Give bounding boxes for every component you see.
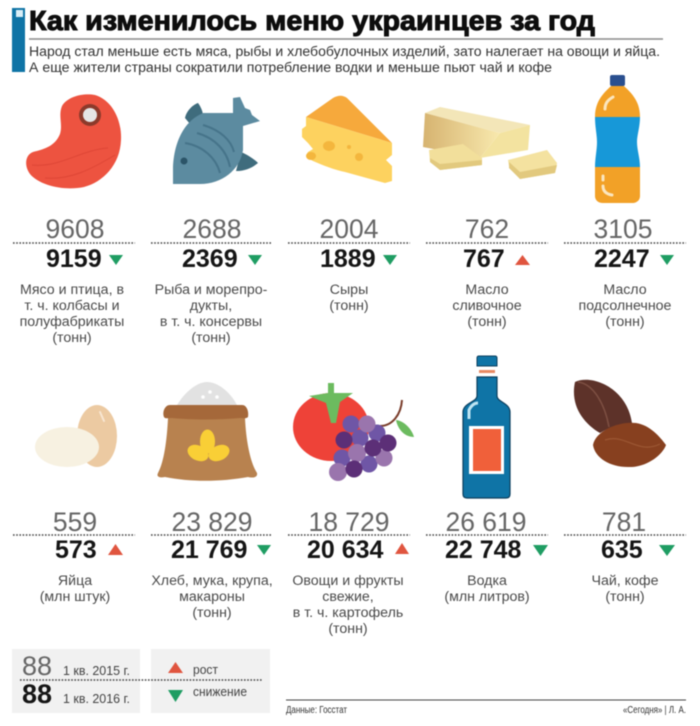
stat label: vegetables: свежие, bbox=[322, 589, 374, 605]
stat label: butter: сливочное bbox=[452, 298, 522, 314]
stat label: butter: (тонн) bbox=[467, 314, 507, 330]
icon: flour sack bbox=[157, 382, 257, 481]
stat label: cheese: Сыры bbox=[330, 282, 368, 298]
stat label: fish: дукты, bbox=[190, 298, 232, 314]
legend: рост bbox=[193, 663, 218, 677]
footer bbox=[286, 700, 686, 716]
icon: vodka bottle bbox=[463, 356, 510, 498]
legend: снижение bbox=[193, 685, 247, 699]
stat: bread: 23 829 bbox=[171, 507, 253, 537]
icon: coffee beans bbox=[574, 380, 666, 467]
stat: sunflower oil bbox=[564, 214, 686, 273]
legend: 88 bbox=[22, 651, 52, 681]
intro text: А еще жители страны сократили потребление водки и меньше пьют чай и кофе bbox=[29, 60, 552, 75]
stat label: vegetables: в т. ч. картофель bbox=[293, 605, 403, 621]
stat: butter: 762 bbox=[465, 214, 509, 244]
icon: tomato and grapes bbox=[293, 383, 414, 481]
stat: vodka: 22 748 bbox=[445, 536, 522, 564]
stat label: fish: Рыба и морепро- bbox=[155, 282, 268, 298]
icon: oil bottle bbox=[595, 75, 640, 203]
footer: «Сегодня» | Л. А. bbox=[623, 705, 686, 716]
stat label: tea and coffee: (тонн) bbox=[605, 589, 645, 605]
stat: bread: 21 769 bbox=[171, 536, 247, 564]
stat: vegetables: 18 729 bbox=[308, 507, 390, 537]
stat label: meat: т. ч. колбасы и bbox=[24, 298, 120, 314]
stat label: vegetables: (тонн) bbox=[328, 621, 368, 637]
stat: eggs: 573 bbox=[55, 536, 97, 564]
icon: meat bbox=[26, 94, 121, 188]
stat label: eggs: Яйца bbox=[58, 573, 92, 589]
stat: fish bbox=[151, 214, 272, 273]
stat label: sunflower oil: Масло bbox=[603, 282, 647, 298]
stat label: vegetables: Овощи и фрукты bbox=[292, 573, 404, 589]
stat: vodka bbox=[426, 507, 548, 564]
stat label: fish: в т. ч. консервы bbox=[160, 314, 262, 330]
stat: vodka: 26 619 bbox=[445, 507, 527, 537]
stat: eggs bbox=[13, 507, 135, 564]
stat label: butter: Масло bbox=[465, 282, 509, 298]
icon: blue header marker bbox=[12, 8, 25, 72]
stat: bread bbox=[151, 507, 272, 564]
stat: sunflower oil: 2247 bbox=[594, 245, 650, 273]
stat: vegetables bbox=[288, 507, 410, 564]
icon: fish bbox=[173, 97, 260, 184]
icon: eggs bbox=[35, 405, 117, 467]
stat label: bread: (тонн) bbox=[192, 605, 232, 621]
legend bbox=[12, 649, 270, 713]
stat label: sunflower oil: (тонн) bbox=[605, 314, 645, 330]
stat label: vodka: (млн литров) bbox=[444, 589, 530, 605]
stat: meat bbox=[13, 214, 135, 273]
stat label: tea and coffee: Чай, кофе bbox=[592, 573, 659, 589]
icon: butter bbox=[423, 107, 557, 179]
stat: meat: 9159 bbox=[46, 245, 102, 273]
stat: fish: 2688 bbox=[183, 214, 241, 244]
stat label: cheese: (тонн) bbox=[329, 298, 369, 314]
stat label: eggs: (млн штук) bbox=[40, 589, 110, 605]
stat: tea and coffee: 781 bbox=[602, 507, 646, 537]
stat label: meat: полуфабрикаты bbox=[20, 314, 124, 330]
stat: tea and coffee: 635 bbox=[601, 536, 643, 564]
stat label: meat: Мясо и птица, в bbox=[20, 282, 124, 298]
intro text: Народ стал меньше есть мяса, рыбы и хлебобулочных изделий, зато налегает на овощи и яйца. bbox=[29, 44, 660, 59]
stat label: bread: макароны bbox=[179, 589, 245, 605]
legend: 1 кв. 2016 г. bbox=[63, 691, 130, 706]
stat label: meat: (тонн) bbox=[52, 330, 92, 346]
stat: cheese bbox=[288, 214, 410, 273]
title: Как изменилось меню украинцев за год bbox=[29, 5, 595, 36]
stat label: vodka: Водка bbox=[467, 573, 507, 589]
stat label: bread: Хлеб, мука, крупа, bbox=[151, 573, 273, 589]
stat label: sunflower oil: подсолнечное bbox=[579, 298, 672, 314]
stat: cheese: 2004 bbox=[320, 214, 378, 244]
stat: tea and coffee bbox=[564, 507, 686, 564]
stat label: fish: (тонн) bbox=[191, 330, 231, 346]
stat: fish: 2369 bbox=[182, 245, 238, 273]
legend: 88 bbox=[22, 679, 52, 709]
stat: vegetables: 20 634 bbox=[307, 536, 384, 564]
stat: meat: 9608 bbox=[46, 214, 104, 244]
stat: butter bbox=[426, 214, 548, 273]
header block bbox=[12, 5, 663, 75]
icon: cheese bbox=[302, 96, 392, 183]
intro text bbox=[29, 44, 660, 75]
legend: 1 кв. 2015 г. bbox=[63, 663, 130, 678]
stat: cheese: 1889 bbox=[320, 245, 376, 273]
stat: sunflower oil: 3105 bbox=[594, 214, 652, 244]
stat: butter: 767 bbox=[463, 245, 505, 273]
stat: eggs: 559 bbox=[53, 507, 97, 537]
footer: Данные: Госстат bbox=[286, 705, 347, 716]
